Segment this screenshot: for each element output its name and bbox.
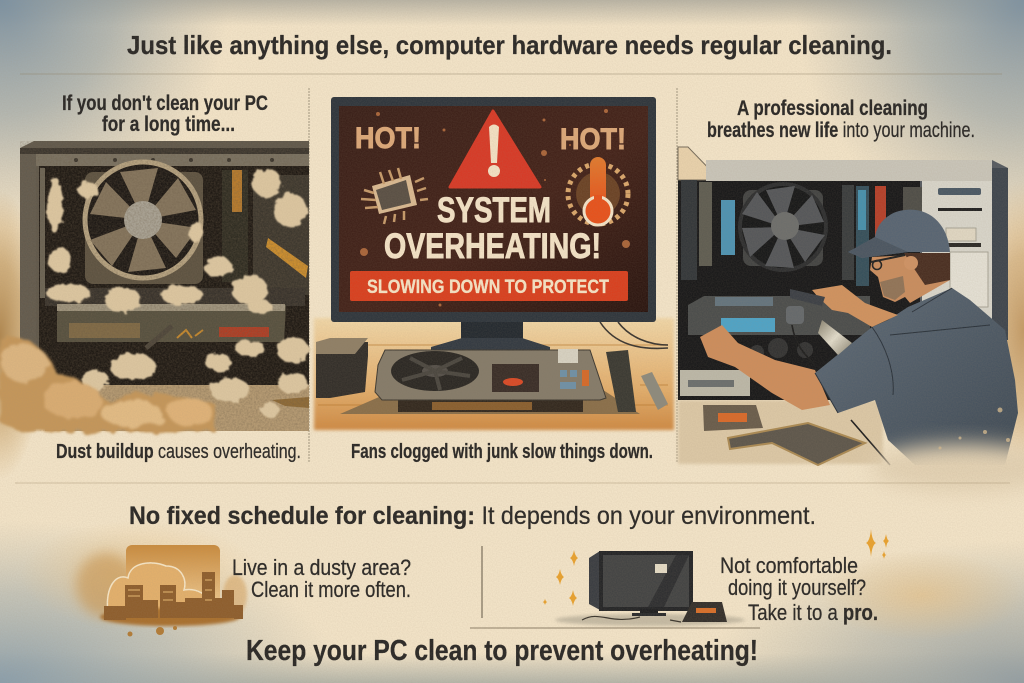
- text: dusty area: Clean it more often.: [251, 577, 411, 602]
- neck and face: [870, 253, 950, 303]
- clogged card: [57, 304, 286, 348]
- hot labels: [355, 122, 626, 156]
- section divider: [15, 482, 1010, 484]
- dust clumps: [46, 169, 309, 417]
- closing message: Keep your PC clean to prevent overheating!: [246, 635, 758, 667]
- dust drift: [0, 338, 215, 432]
- shirt: [815, 288, 1018, 465]
- caption: fans clogged: Fans clogged with junk slow things down.: [351, 441, 653, 463]
- panel: overheating monitor: [314, 97, 674, 463]
- cap: [848, 210, 950, 258]
- technician: [700, 210, 1018, 465]
- sparkles: [543, 529, 889, 606]
- panel text: intro: for a long time...: [102, 113, 235, 136]
- desk: [314, 318, 674, 430]
- icon: cpu chip: [361, 168, 428, 224]
- text: take it to a pro: Not comfortable: [720, 553, 858, 578]
- illustration: dusty open case: [0, 141, 309, 432]
- hard drives: [316, 338, 368, 398]
- bottom heading: No fixed schedule for cleaning: It depends on your environment.: [129, 502, 816, 530]
- icon: clean PC and monitor: [543, 529, 889, 626]
- title: Just like anything else, computer hardware needs regular cleaning.: [127, 30, 892, 60]
- upper arm and hand: [812, 285, 898, 327]
- panel text: outcome: A professional cleaning: [737, 97, 928, 120]
- graphics card: [340, 349, 668, 414]
- panel text: outcome: breathes new life into your machine.: [707, 119, 975, 142]
- alert bar: SLOWING DOWN TO PROTECT: [367, 277, 609, 298]
- air can: [818, 320, 852, 355]
- panel: professional cleaning: [678, 97, 1024, 492]
- illustration: clean open case: [678, 147, 1008, 465]
- panel text: intro: [62, 92, 268, 136]
- dust fade: [870, 408, 1024, 492]
- hot labels: HOT!: [560, 123, 626, 156]
- text: dusty area: [232, 555, 411, 602]
- text: take it to a pro: doing it yourself?: [728, 575, 866, 600]
- take to a pro tip: [543, 529, 889, 626]
- caption: dust buildup: Dust buildup causes overheating.: [56, 441, 301, 463]
- panel text: outcome: [707, 97, 975, 142]
- panel text: intro: If you don't clean your PC: [62, 92, 268, 115]
- dusty fan: [85, 162, 201, 278]
- headline: [384, 191, 601, 266]
- text: take it to a pro: [720, 553, 878, 625]
- headline: OVERHEATING!: [384, 227, 601, 266]
- alert bar: [350, 271, 628, 301]
- hot labels: HOT!: [355, 122, 421, 155]
- clean fan: [740, 184, 826, 270]
- icon: thermometer: [568, 157, 628, 225]
- headline: SYSTEM: [437, 191, 551, 230]
- panel: dirty PC: [0, 92, 309, 463]
- icon: dusty city: [76, 545, 247, 636]
- dusty area tip: [76, 545, 411, 636]
- monitor stand: [431, 320, 550, 351]
- text: dusty area: Live in a dusty area?: [232, 555, 411, 580]
- lower arm: [700, 325, 830, 410]
- monitor: [331, 97, 656, 322]
- text: take it to a pro: Take it to a pro.: [748, 600, 878, 625]
- warning triangle: [450, 111, 540, 187]
